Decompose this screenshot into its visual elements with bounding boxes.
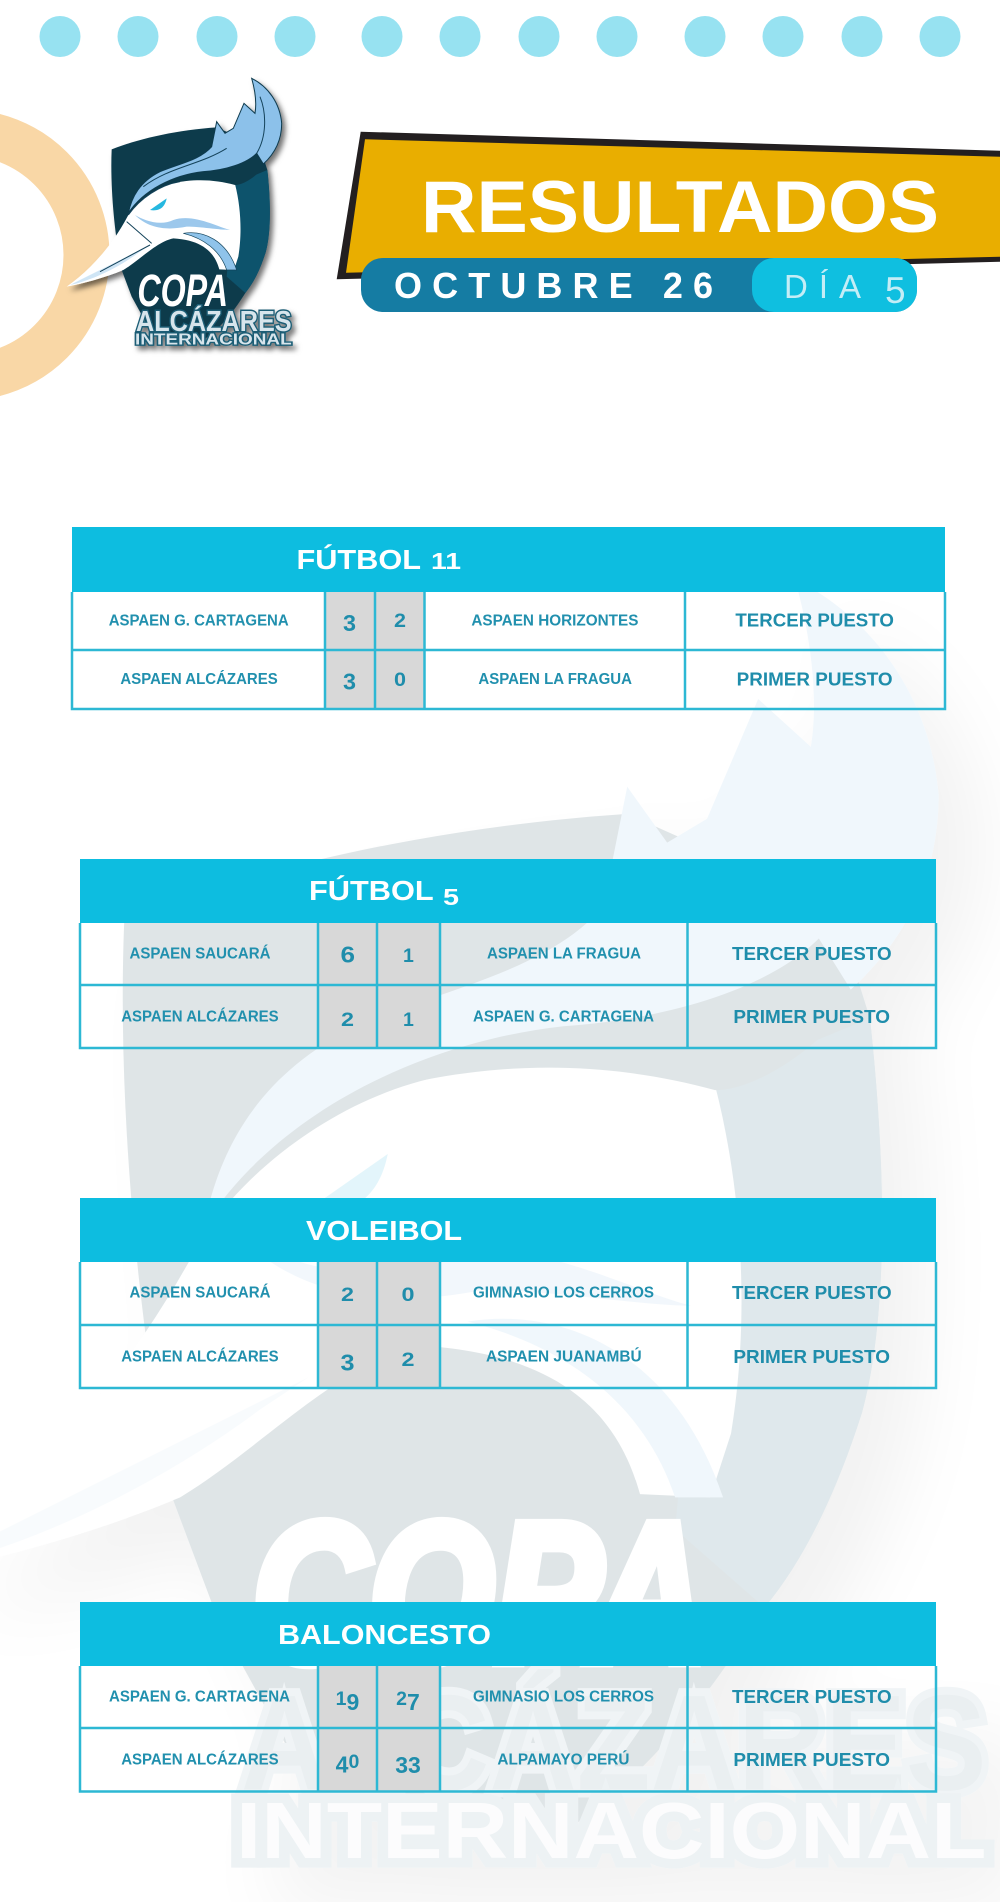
day badge — [752, 258, 917, 312]
match 2: ASPAEN ALCÁZARES — [121, 1750, 279, 1769]
match 2: ALPAMAYO PERÚ — [497, 1750, 629, 1769]
match 2: PRIMER PUESTO — [737, 670, 893, 690]
match 1 — [109, 1687, 892, 1715]
match 1: 1 — [336, 1688, 347, 1710]
match 2: 0 — [348, 1751, 359, 1773]
day label: DÍA — [784, 268, 861, 305]
match 1: 6 — [340, 942, 355, 968]
match 1: 7 — [407, 1689, 420, 1715]
match 2: 33 — [395, 1752, 421, 1778]
title banner — [337, 132, 1000, 279]
panel: Voleibol — [80, 1198, 936, 1388]
match 1: 3 — [343, 610, 356, 636]
match 2 — [121, 1347, 890, 1376]
match 2: 4 — [336, 1752, 349, 1778]
panel: Fútbol 5 — [80, 859, 936, 1048]
match 1 — [130, 1283, 892, 1306]
decorative peach ring — [0, 132, 86, 378]
heading: 11 — [431, 548, 461, 574]
match 2: ASPAEN ALCÁZARES — [120, 669, 278, 688]
match 1: TERCER PUESTO — [732, 1283, 892, 1303]
match 2: ASPAEN JUANAMBÚ — [486, 1347, 642, 1366]
panel: Baloncesto — [80, 1602, 936, 1792]
match 2: ASPAEN ALCÁZARES — [121, 1007, 279, 1026]
match 1: ASPAEN LA FRAGUA — [487, 946, 641, 963]
title: RESULTADOS: RESULTADOS — [421, 167, 939, 248]
match 1: 1 — [403, 945, 414, 967]
logo: Copa Alcázares Internacional — [67, 78, 292, 349]
match 2: 3 — [343, 668, 356, 694]
heading — [296, 544, 461, 575]
match 1: GIMNASIO LOS CERROS — [473, 1689, 654, 1706]
match 2: 1 — [403, 1009, 414, 1031]
match 1: ASPAEN SAUCARÁ — [130, 1283, 271, 1302]
watermark: large faded logo: COPA — [252, 1482, 707, 1705]
match 1: TERCER PUESTO — [732, 944, 892, 964]
match 2: ASPAEN G. CARTAGENA — [473, 1009, 654, 1026]
match 1: 2 — [341, 1284, 354, 1306]
match 2: PRIMER PUESTO — [733, 1750, 890, 1770]
match 2: ASPAEN ALCÁZARES — [121, 1347, 279, 1366]
match 2: 3 — [340, 1350, 354, 1376]
match 1: ASPAEN HORIZONTES — [471, 613, 639, 630]
logo: Copa Alcázares Internacional: ALCÁZARES — [136, 306, 292, 338]
match 1: 9 — [347, 1689, 359, 1715]
watermark: large faded logo: INTERNACIONAL — [236, 1786, 987, 1875]
match 2: 0 — [394, 669, 406, 691]
match 1: 2 — [394, 610, 406, 632]
match 2 — [121, 1007, 890, 1031]
date text: OCTUBRE 26 — [394, 265, 713, 306]
logo: Copa Alcázares Internacional: INTERNACIONAL — [135, 332, 292, 349]
watermark: large faded logo — [0, 579, 987, 1875]
match 2: PRIMER PUESTO — [733, 1347, 890, 1367]
match 2 — [121, 1750, 890, 1778]
match 1: ASPAEN SAUCARÁ — [130, 944, 271, 963]
match 2: 2 — [402, 1349, 415, 1371]
heading: FÚTBOL — [309, 875, 434, 906]
match 1 — [130, 942, 892, 968]
panel: Fútbol 11 — [72, 527, 945, 709]
logo: Copa Alcázares Internacional: COPA — [137, 265, 228, 316]
match 1: ASPAEN G. CARTAGENA — [109, 613, 289, 630]
match 2: PRIMER PUESTO — [733, 1007, 890, 1027]
match 1: GIMNASIO LOS CERROS — [473, 1285, 654, 1302]
heading: 5 — [443, 884, 459, 910]
match 1: 0 — [402, 1284, 415, 1306]
day number: 5 — [885, 270, 906, 311]
row of light blue dots — [40, 16, 960, 57]
match 2: ASPAEN LA FRAGUA — [478, 671, 632, 688]
match 1: TERCER PUESTO — [735, 611, 894, 631]
match 1: 2 — [396, 1688, 407, 1710]
date pill — [361, 258, 917, 312]
match 1: TERCER PUESTO — [732, 1687, 892, 1707]
heading: VOLEIBOL — [306, 1215, 462, 1246]
match 2: 2 — [341, 1009, 354, 1031]
match 1: ASPAEN G. CARTAGENA — [109, 1689, 290, 1706]
heading: BALONCESTO — [278, 1619, 491, 1650]
heading: FÚTBOL — [296, 544, 421, 575]
heading — [309, 875, 459, 910]
match 2 — [120, 668, 893, 694]
match 1 — [109, 610, 894, 636]
